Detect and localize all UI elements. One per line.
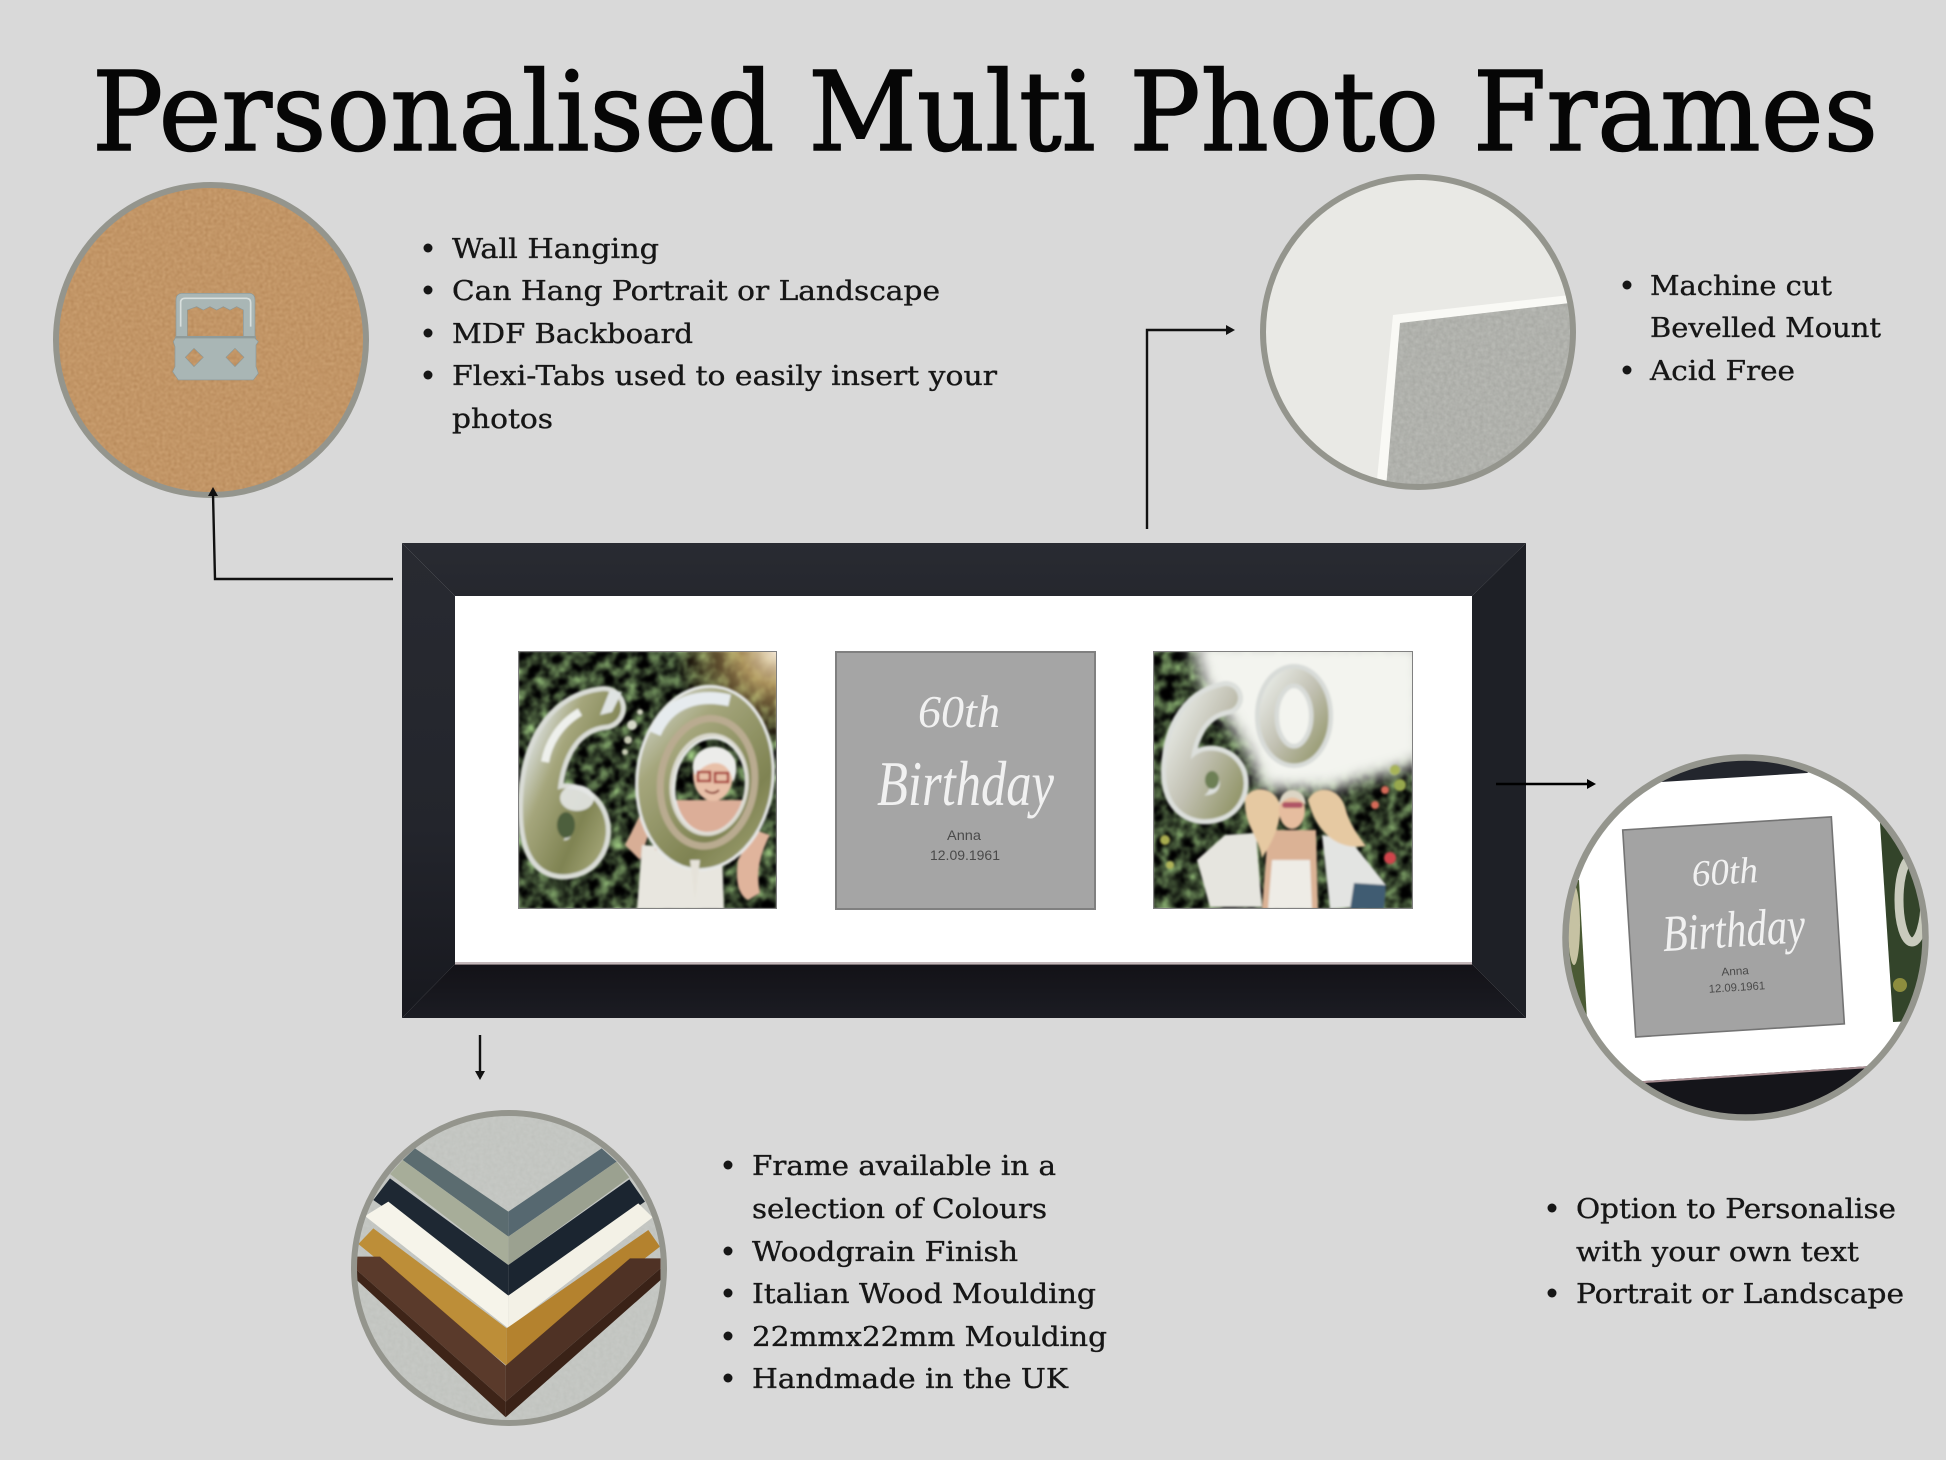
personalised text card: Anna (947, 827, 981, 843)
moulding: sage (390, 1160, 629, 1265)
rotated text card (1623, 817, 1844, 1037)
personalised text card (836, 652, 1095, 909)
balloon: six (540, 708, 604, 857)
text block: personalisation features: Option to Personalise (1576, 1194, 1896, 1225)
text block: moulding features: selection of Colours (752, 1194, 1047, 1225)
text block: moulding features (724, 1151, 1107, 1395)
text block: wall hanging features: Wall Hanging (452, 234, 659, 265)
rotated text card: Birthday (1661, 897, 1807, 963)
text block: moulding features: 22mmx22mm Moulding (752, 1322, 1107, 1353)
personalised text card: 60th (918, 686, 1000, 737)
white mount (455, 596, 1472, 964)
moulding: slate (403, 1148, 617, 1237)
icon: sawtooth hanger (173, 293, 258, 380)
arrow: frame to moulding samples (475, 1035, 485, 1080)
text block: personalisation features (1548, 1194, 1904, 1310)
moulding: gold (358, 1228, 660, 1366)
rotated text card: Anna (1721, 965, 1750, 979)
panel: framed photo product (402, 543, 1526, 1018)
text block: mount features: Bevelled Mount (1650, 313, 1881, 344)
text block: wall hanging features: Flexi-Tabs used to easily insert your (452, 361, 997, 392)
moulding: navy (373, 1178, 645, 1296)
personalised text card: Birthday (877, 748, 1054, 819)
panel: backboard circle (50, 180, 372, 502)
text block: wall hanging features: photos (452, 404, 553, 435)
photo: three women with 60 balloons (1153, 640, 1425, 909)
arrow: frame to mount (1147, 325, 1235, 529)
text block: mount features: Acid Free (1649, 356, 1795, 387)
text block: moulding features: Woodgrain Finish (752, 1237, 1018, 1268)
panel: moulding colour samples circle (345, 1105, 675, 1435)
text block: personalisation features: Portrait or Landscape (1576, 1279, 1904, 1310)
text block: wall hanging features: Can Hang Portrait or Landscape (452, 276, 940, 307)
text block: wall hanging features (424, 234, 997, 435)
balloon: zero (633, 683, 776, 870)
text block: mount features: Machine cut (1650, 271, 1832, 302)
text block: mount features (1622, 271, 1881, 387)
text block: wall hanging features: MDF Backboard (452, 319, 693, 350)
moulding: walnut (357, 1257, 661, 1417)
rotated text card: 12.09.1961 (1708, 980, 1766, 996)
text block: moulding features: Italian Wood Moulding (752, 1279, 1096, 1310)
three women (1197, 833, 1262, 907)
panel: bevelled mount circle (1255, 170, 1590, 500)
arrow: frame to backboard (208, 487, 393, 579)
arrow: frame to personalised insert (1496, 779, 1596, 789)
rotated text card: 60th (1691, 850, 1759, 895)
balloon: six (1178, 698, 1232, 807)
personalised text card: 12.09.1961 (930, 847, 1000, 863)
photo: woman with 60 balloons (518, 651, 784, 909)
black frame moulding (402, 543, 1526, 1018)
moulding: white (365, 1202, 653, 1328)
text block: moulding features: Handmade in the UK (752, 1364, 1069, 1395)
text block: moulding features: Frame available in a (752, 1151, 1056, 1182)
balloon: zero (1267, 676, 1321, 756)
text block: personalisation features: with your own text (1576, 1237, 1859, 1268)
panel: personalised insert circle (1560, 750, 1935, 1125)
title: Personalised Multi Photo Frames (92, 48, 1878, 176)
